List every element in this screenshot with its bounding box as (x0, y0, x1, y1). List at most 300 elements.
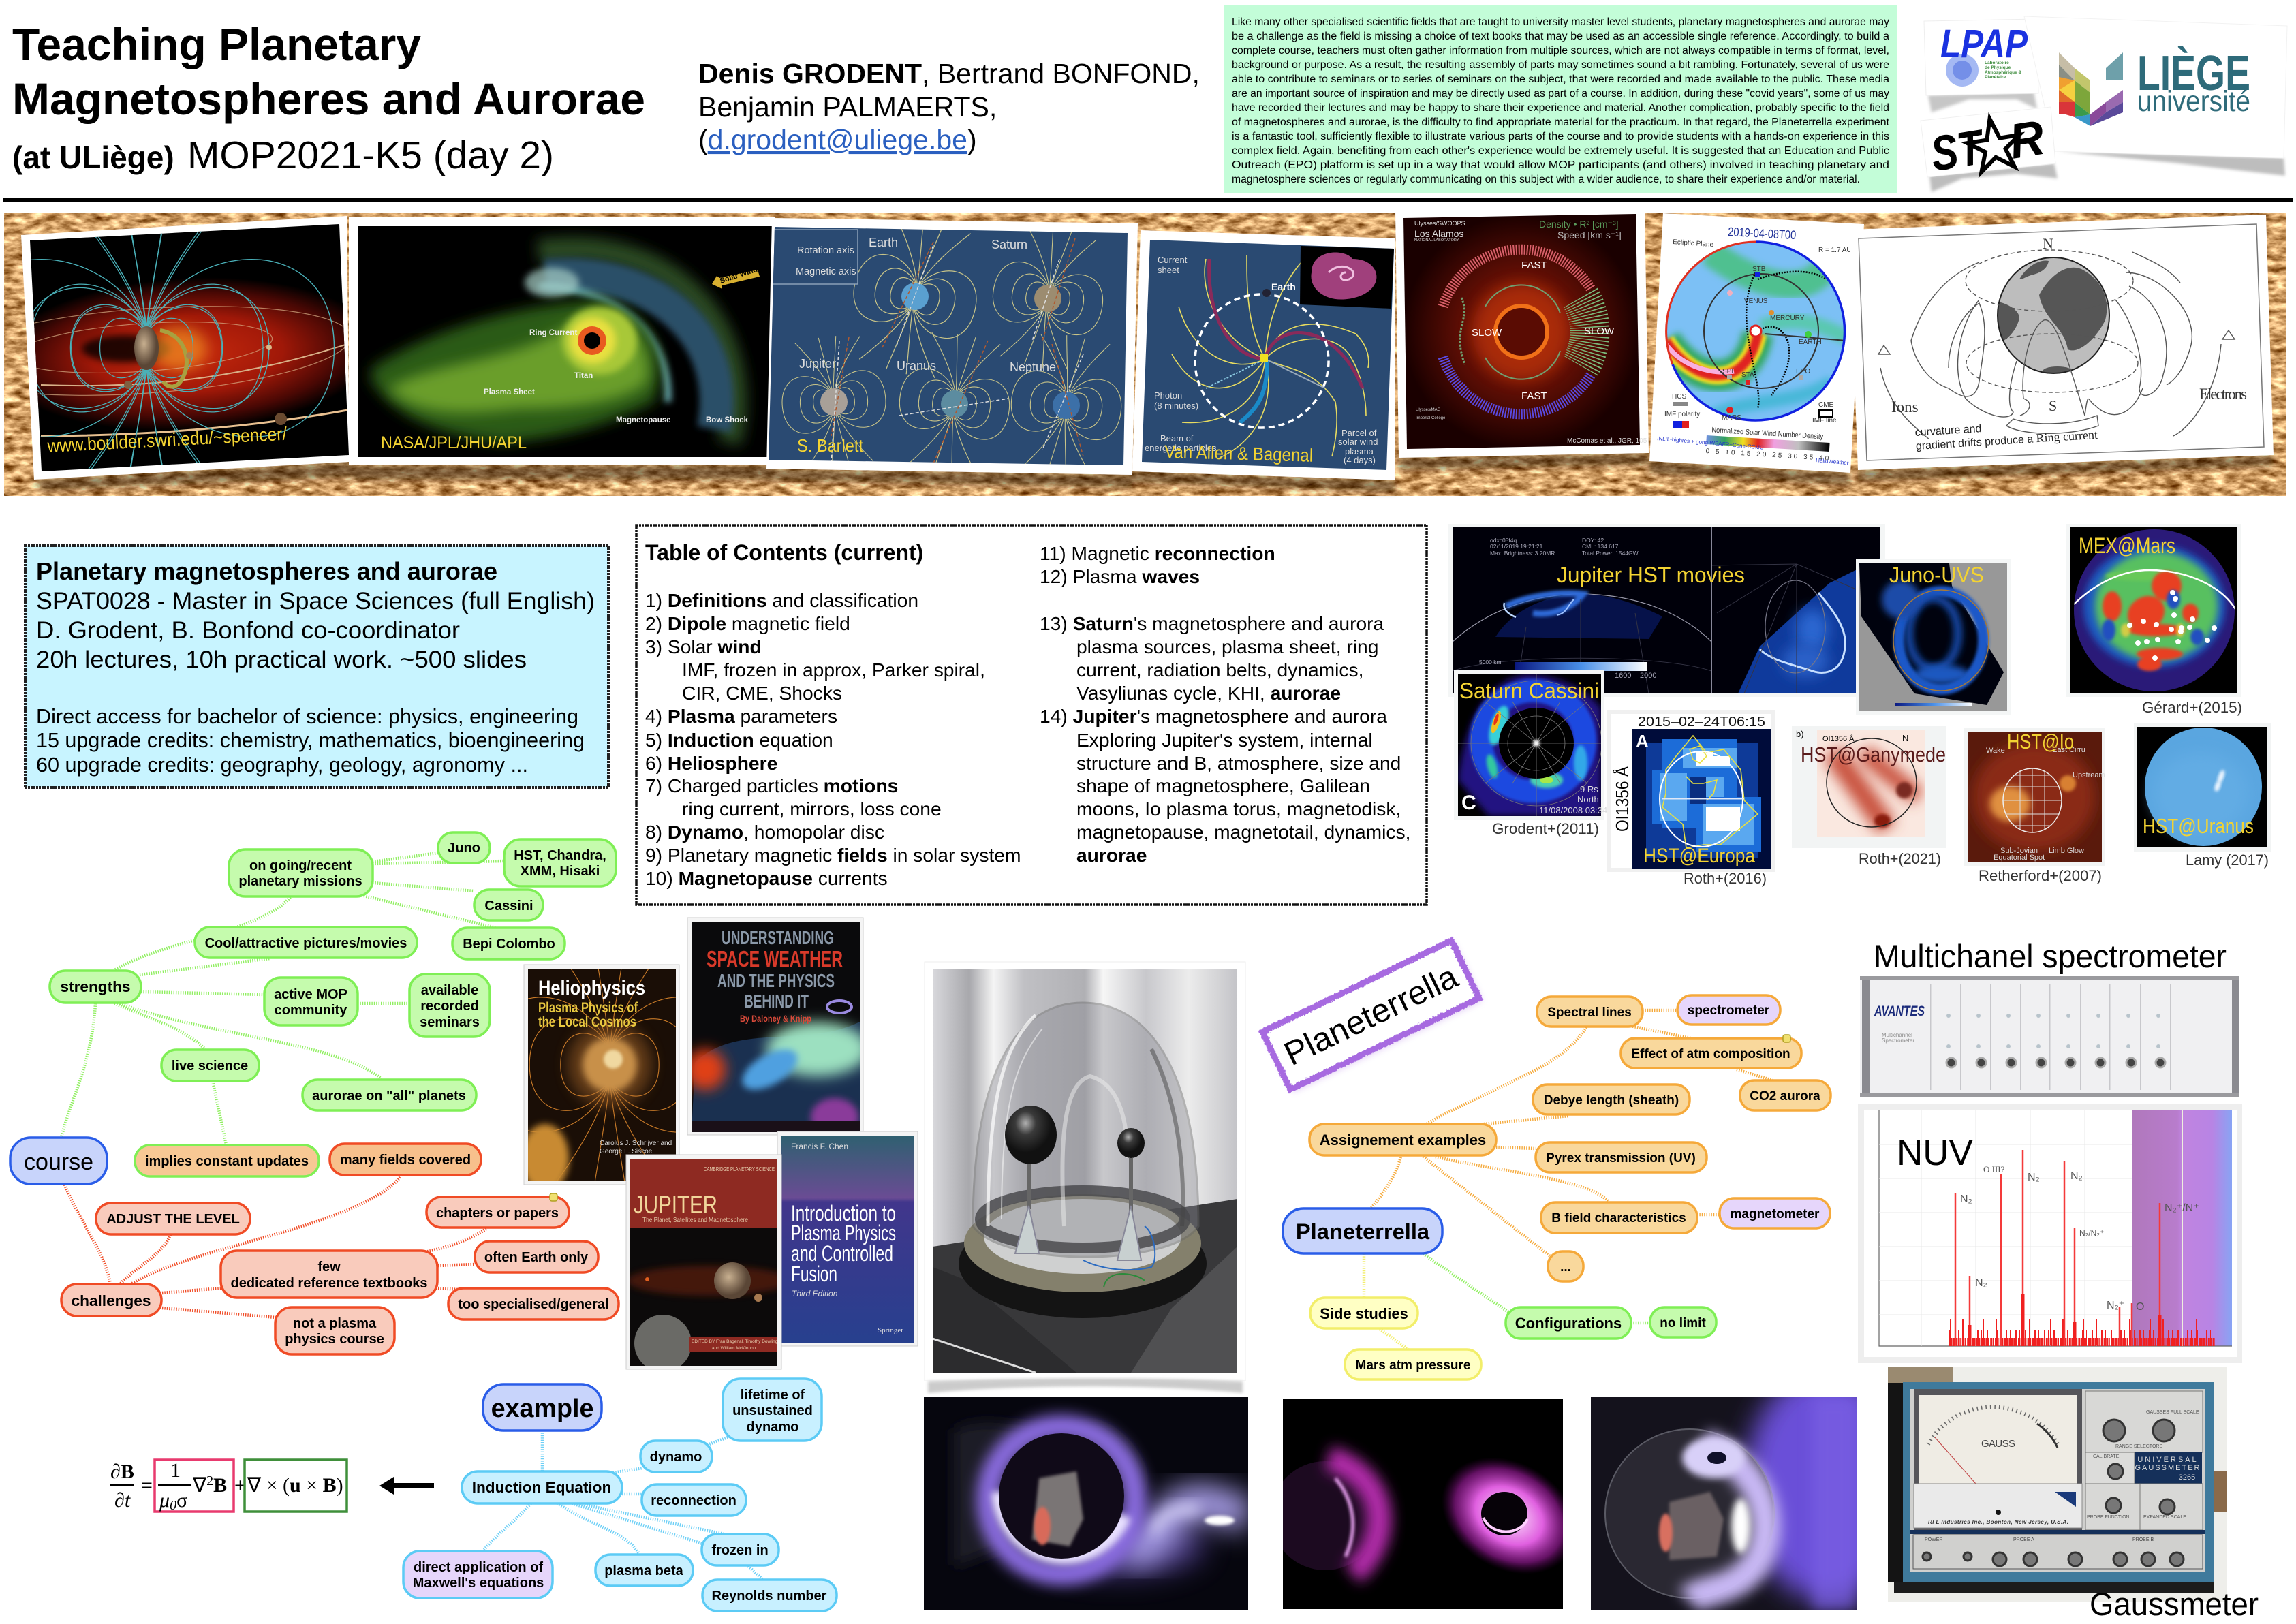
node: active MOP (264, 978, 358, 1025)
node: Cassini: Cassini (484, 899, 533, 914)
image: Saturn Cassini: Saturn Cassini (1459, 678, 1599, 703)
node: direct: direct application of (414, 1560, 543, 1575)
node: many fields (330, 1144, 481, 1175)
mind map: induction example (403, 1379, 837, 1611)
book: Jupiter: JUPITER (634, 1191, 717, 1219)
abstract: Outreach (EPO) platform is set up in a way that would allow MOP participants (and others) involved in teaching planetary and (1232, 159, 1889, 171)
credit: Van Allen: Van Allen & Bagenal (1164, 441, 1314, 466)
image: spectrometer rack: Multichannel (1882, 1032, 1912, 1038)
labels: solar wind: SLOW (1472, 327, 1502, 339)
abstract: complex field. Again, benefiting from each other's experience would be extremely useful. It is suggested that an Education and Public (1232, 145, 1889, 157)
mind map: course strengths (50, 832, 616, 1176)
labels: ENLIL: EPO (1796, 368, 1810, 375)
node: not a plasma: not a plasma (293, 1316, 377, 1331)
labels: ENLIL: CME (1818, 401, 1834, 409)
node: Cool (195, 927, 417, 958)
mind map: course challenges (61, 1144, 619, 1354)
book: Jupiter (626, 1155, 790, 1372)
mind map: planeterrella assignments (1309, 995, 1831, 1281)
node: chapters (426, 1197, 569, 1228)
book: Introduction to Plasma Physics (777, 1131, 918, 1346)
peak labels: N₂ (1960, 1193, 1972, 1205)
photo: ring current diagram (1849, 215, 2274, 470)
marker (1783, 1035, 1790, 1042)
node: available: seminars (420, 1015, 480, 1030)
equation: induction: 1 (170, 1459, 181, 1482)
panel: table of contents: IMF, frozen in approx, Parker spiral, (682, 659, 985, 681)
panel: table of contents: Vasyliunas cycle, KHI, aurorae (1076, 682, 1341, 704)
node: too: too specialised/general (458, 1297, 609, 1312)
arrow: equation pointer (379, 1477, 434, 1495)
panel: table of contents: 11) Magnetic reconnection (1040, 542, 1275, 564)
node: reconnection (642, 1484, 746, 1516)
peak labels (1960, 1164, 2199, 1313)
node: Planeterrella tag (1262, 940, 1482, 1093)
image: spectrometer rack (1860, 976, 2239, 1097)
node: spectrometer (1677, 995, 1780, 1025)
image: MEX at Mars: MEX@Mars (2079, 533, 2175, 558)
image: HST at Io: Equatorial Spot (1994, 854, 2045, 862)
mind map: side studies (1310, 1298, 1481, 1379)
book: Jupiter: The Planet, Satellites and Magnetosphere (642, 1216, 748, 1224)
image: HST at Io: Sub-Jovian (2000, 847, 2038, 855)
panel: table of contents: plasma sources, plasma sheet, ring (1076, 636, 1378, 657)
image: MEX at Mars (2066, 524, 2241, 697)
mind map: configurations (1506, 1307, 1716, 1339)
panel: table of contents: 12) Plasma waves (1040, 565, 1200, 587)
logo: STAR: ST (1927, 120, 1989, 182)
image: HST at Europa (1607, 710, 1775, 872)
panel: table of contents: 13) Saturn's magnetosphere and aurora (1040, 612, 1384, 634)
equation: induction: + (234, 1474, 246, 1497)
labels: solar wind: Los Alamos (1414, 228, 1463, 239)
abstract: able to contribute to seminars or to series of seminars on the subject, that were recorded and made available to the public. These media (1232, 74, 1889, 85)
image: gaussmeter: GAUSSMETER (2135, 1464, 2201, 1472)
panel: table of contents: 9) Planetary magnetic fields in solar system (645, 844, 1021, 866)
labels: solar wind (1414, 219, 1647, 445)
image: HST at Io (1964, 728, 2105, 866)
panel: table of contents: shape of magnetosphere, Galilean (1076, 775, 1370, 796)
labels: planets: Jupiter (799, 357, 836, 371)
photo: planetary dipoles (763, 206, 1138, 482)
abstract: of magnetospheres and aurorae, is the difficulty to find appropriate material for the practicum. In that regard, the Planeterrella experiment (1232, 116, 1890, 128)
image: HST at Uranus: HST@Uranus (2143, 814, 2254, 838)
node: available: recorded (420, 999, 479, 1014)
node: not a plasma: physics course (285, 1332, 384, 1347)
image: HST at Europa: A (1636, 731, 1649, 751)
node: side studies (1310, 1298, 1418, 1328)
labels: solar wind: Ulysses/MAG (1416, 408, 1441, 412)
labels: ENLIL: STA (1741, 371, 1754, 379)
labels: spiral: Parcel of (1341, 428, 1377, 438)
node: configurations (1506, 1307, 1631, 1339)
panel: table of contents: 5) Induction equation (645, 729, 833, 751)
node: mars (1345, 1349, 1481, 1379)
abstract: complete course, teachers must often gather information from multiple sources, which are not always compatible in terms of format, level, (1232, 45, 1889, 57)
book: Heliophysics: the Local Cosmos (538, 1014, 636, 1030)
node: pyrex: Pyrex transmission (UV) (1546, 1151, 1696, 1166)
node: HST: XMM, Hisaki (521, 864, 600, 879)
equation: induction: ∇ (193, 1474, 206, 1497)
peak labels: N₂/N₂⁺ (2079, 1228, 2104, 1238)
title: Magnetospheres and Aurorae (12, 74, 645, 124)
labels: ENLIL: IMF line (1812, 417, 1837, 424)
panel: course summary: D. Grodent, B. Bonfond co-coordinator (36, 616, 460, 644)
node: ellipsis: ... (1560, 1260, 1571, 1275)
panel: table of contents: 1) Definitions and classification (645, 589, 918, 611)
image: Saturn Cassini: North (1577, 794, 1599, 805)
node: available (409, 974, 490, 1037)
book: Heliophysics: Plasma Physics of (538, 1000, 638, 1016)
node: reconnection: reconnection (651, 1493, 736, 1508)
node: course (10, 1138, 107, 1184)
cork background (4, 213, 2286, 496)
image: Jupiter HST movies: CML: 134.617 (1582, 543, 1619, 550)
node: CO2 (1740, 1080, 1831, 1110)
logo: Liège université: LIÈGE (2137, 46, 2250, 101)
panel: table of contents: moons, Io plasma torus, magnetodisk, (1076, 798, 1401, 819)
node: few (221, 1251, 437, 1298)
book: Understanding Space Weather: UNDERSTANDING (722, 927, 834, 948)
image: HST at Io: HST@Io (2007, 730, 2074, 753)
image: HST at Europa: HST@Europa (1643, 845, 1755, 867)
labels: ENLIL: 2019-04-08T00 (1728, 225, 1797, 242)
colorbar (1705, 426, 1831, 463)
image: HST at Io: Wake (1986, 747, 2005, 755)
image: Jupiter HST movies (1448, 524, 1885, 697)
book: Understanding Space Weather: AND THE PHYSICS (717, 970, 835, 991)
node: updates: implies constant updates (145, 1154, 309, 1169)
node: direct: Maxwell's equations (413, 1576, 544, 1591)
node: lifetime: lifetime of (741, 1388, 805, 1403)
labels: ENLIL: STB (1752, 266, 1766, 273)
labels: planets: Rotation axis (797, 245, 854, 256)
label: Gaussmeter: Gaussmeter (2090, 1587, 2259, 1623)
book: Heliophysics (486, 909, 733, 1220)
image: gaussmeter: CALIBRATE (2093, 1454, 2120, 1459)
peak labels: O (2136, 1301, 2144, 1313)
labels: solar wind: Ulysses/SWOOPS (1414, 220, 1465, 227)
photo: aurora on sphere C (1591, 1369, 1908, 1610)
image: Jupiter HST movies: 5000 km (1479, 659, 1502, 666)
photo: ENLIL heliosphere: INLIL-highres + gong-WSAFR+Cone-CCMC (1657, 435, 1764, 451)
node: too (448, 1288, 619, 1320)
image: gaussmeter: GAUSS (1981, 1438, 2015, 1450)
image: Jupiter HST movies: DOY: 42 (1582, 537, 1604, 544)
book: Jupiter: and William McKinnon (712, 1346, 756, 1351)
logo: STAR: R (2006, 110, 2048, 170)
caption: Roth 2021: Roth+(2021) (1859, 850, 1941, 867)
panel: table of contents: structure and B, atmosphere, size and (1076, 752, 1401, 774)
chart: NUV spectrum (1858, 1104, 2242, 1363)
marker (550, 1193, 557, 1201)
labels: Saturn diagram: Ring Current (529, 329, 577, 337)
node: adjust: ADJUST THE LEVEL (106, 1212, 240, 1227)
panel: table of contents: Exploring Jupiter's system, internal (1076, 729, 1373, 751)
image: Jupiter HST movies: odxc05f4q (1490, 537, 1517, 544)
panel: table of contents (636, 525, 1427, 905)
labels: solar wind: McComas et al., JGR, 105 (1567, 437, 1647, 445)
image: HST at Ganymede: b) (1796, 729, 1804, 739)
image: gaussmeter: PROBE FUNCTION (2087, 1515, 2130, 1520)
logo: STAR (1921, 107, 2058, 192)
node: missions (229, 849, 373, 896)
node: lifetime: unsustained (732, 1403, 813, 1418)
image: gaussmeter: EXPANDED SCALE (2143, 1515, 2186, 1520)
labels: spiral: Beam of (1160, 433, 1194, 443)
labels: spiral (1145, 255, 1378, 465)
logo: LPAP: de Physique (1985, 65, 2011, 70)
equation: induction: 0 (170, 1498, 176, 1513)
peak labels: N₂⁺/N⁺ (2165, 1202, 2199, 1214)
node: active MOP: active MOP (274, 987, 347, 1002)
photo: Jupiter magnetosphere (21, 216, 349, 480)
equation: induction: 2 (206, 1473, 213, 1488)
node: live science: live science (172, 1059, 248, 1074)
title: (at ULiège) (12, 140, 174, 175)
node: strengths (50, 971, 141, 1003)
image: Jupiter HST movies: Jupiter HST movies (1557, 563, 1745, 587)
book: Heliophysics: Heliophysics (538, 977, 645, 999)
node: induction (462, 1471, 622, 1503)
photo: aurora on sphere A (924, 1397, 1248, 1610)
book: Understanding Space Weather: SPACE WEATHER (707, 946, 843, 971)
node: Bepi (452, 928, 565, 959)
labels: ENLIL: HCS (1672, 393, 1686, 401)
labels: planets: Neptune (1010, 360, 1056, 374)
labels: ENLIL: EARTH (1799, 339, 1822, 346)
node: Bepi: Bepi Colombo (463, 937, 555, 952)
logo: Liège université (2024, 16, 2287, 176)
image: Saturn Cassini: 9 Rs (1580, 784, 1598, 794)
authors: Benjamin PALMAERTS, (698, 91, 997, 123)
panel: table of contents: ring current, mirrors, loss cone (682, 798, 942, 819)
image: Saturn Cassini (1454, 670, 1607, 820)
image: Jupiter HST movies: Max. Brightness: 3.20MR (1490, 550, 1555, 557)
node: Cool: Cool/attractive pictures/movies (205, 936, 407, 951)
labels: spiral: (8 minutes) (1154, 401, 1198, 411)
equation: induction: ∇ × (u × B) (247, 1474, 343, 1497)
panel: table of contents: 4) Plasma parameters (645, 705, 837, 727)
panel: course summary: Direct access for bachelor of science: physics, engineering (36, 705, 578, 728)
labels: Saturn diagram: Plasma Sheet (484, 388, 535, 396)
node: mars: Mars atm pressure (1356, 1358, 1470, 1373)
node: missions: on going/recent (249, 858, 352, 873)
panel: table of contents: magnetopause, magnetotail, dynamics, (1076, 821, 1410, 843)
node: Juno (438, 832, 490, 863)
labels: ENLIL (1664, 225, 1852, 424)
node: spectrometer: spectrometer (1688, 1003, 1770, 1018)
equation: induction: ∂t (114, 1489, 131, 1512)
labels: ring current: N (2043, 235, 2053, 252)
node: active MOP: community (275, 1003, 347, 1018)
node: b field (1541, 1202, 1697, 1233)
image: HST at Ganymede: HST@Ganymede (1801, 743, 1946, 766)
panel: table of contents: 2) Dipole magnetic field (645, 612, 850, 634)
logo: LPAP: Planétaire (1985, 75, 2006, 80)
equation: induction: μ (159, 1489, 170, 1512)
node: adjust (96, 1203, 250, 1234)
book: Understanding Space Weather: By Daloney & Knipp (740, 1013, 811, 1024)
labels: ring current: S (2049, 397, 2057, 414)
panel: table of contents: aurorae (1076, 844, 1147, 866)
book: Jupiter: EDITED BY Fran Bagenal, Timothy Dowling (692, 1339, 778, 1344)
node: few: dedicated reference textbooks (230, 1276, 428, 1291)
image: Jupiter HST movies: 02/11/2019 19:21:21 (1490, 543, 1543, 550)
node: Planeterrella: Planeterrella (1296, 1219, 1430, 1244)
panel: course summary: SPAT0028 - Master in Space Sciences (full English) (36, 587, 595, 614)
image: gaussmeter: PROBE A (2013, 1537, 2034, 1542)
labels: ring current: Ions (1891, 399, 1919, 416)
image: gaussmeter (1888, 1367, 2227, 1602)
logo: LPAP (1924, 19, 2038, 112)
abstract: have recorded their lectures and may be happy to share their experience and material. Another complication, probably specific to the field (1232, 102, 1889, 114)
image: Jupiter HST movies: 1600 (1615, 672, 1631, 680)
authors (698, 58, 1200, 155)
node: ellipsis (1548, 1251, 1583, 1281)
panel: course summary: 15 upgrade credits: chemistry, mathematics, bioengineering (36, 729, 585, 752)
photo: aurora on spheres B (1271, 1399, 1598, 1609)
image: Jupiter HST movies: Total Power: 1544GW (1582, 550, 1639, 557)
node: updates (135, 1145, 319, 1176)
node: effect (1621, 1038, 1801, 1068)
labels: spiral: (4 days) (1344, 455, 1376, 465)
labels: planets: Saturn (991, 238, 1027, 251)
labels: planets: Earth (869, 236, 898, 249)
abstract: Like many other specialised scientific fields that are taught to university master level students, planetary magnetospheres and aurorae may (1232, 16, 1889, 28)
logo: LPAP: Laboratoire (1985, 61, 2009, 65)
image: gaussmeter: PROBE B (2132, 1537, 2154, 1542)
node: plasma beta: plasma beta (604, 1563, 684, 1578)
equation: induction: B (213, 1474, 227, 1497)
node: strengths: strengths (61, 978, 130, 995)
abstract (1224, 5, 1897, 193)
node: no limit (1650, 1307, 1716, 1337)
node: Cassini (474, 890, 543, 920)
labels: solar wind: SLOW (1584, 326, 1615, 337)
image: Saturn Cassini: 11/08/2008 03:34 (1539, 805, 1607, 815)
book: Understanding Space Weather: BEHIND IT (744, 990, 809, 1012)
credit: NASA: NASA/JPL/JHU/APL (381, 433, 527, 452)
node: often (475, 1241, 598, 1272)
book: Heliophysics: Carolus J. Schrijver and (600, 1140, 672, 1147)
caption: Roth 2016: Roth+(2016) (1684, 870, 1767, 887)
logo: LPAP: LPAP (1940, 22, 2028, 66)
labels: spiral: Earth (1271, 281, 1296, 292)
panel: table of contents: 7) Charged particles motions (645, 775, 898, 796)
panel: course summary: 20h lectures, 10h practical work. ~500 slides (36, 646, 527, 673)
title: Teaching Planetary (12, 20, 422, 69)
labels: ring current (1891, 235, 2247, 416)
logo: LPAP: Atmosphérique & (1985, 70, 2021, 75)
node: Planeterrella (1283, 1208, 1442, 1253)
abstract: are an important source of inspiration and may be directly used as part of a course. In addition, during these "covid years", some of us may (1232, 88, 1889, 99)
panel: table of contents: CIR, CME, Shocks (682, 682, 842, 704)
photo shadows (34, 453, 2274, 492)
photo: Parker spiral (1132, 230, 1395, 480)
image: HST at Io: Upstream (2073, 771, 2105, 779)
labels: solar wind: Imperial College (1416, 416, 1446, 420)
labels: ENLIL: IMF polarity (1664, 411, 1700, 418)
node: plasma beta (595, 1555, 693, 1586)
node: side studies: Side studies (1320, 1305, 1408, 1322)
abstract: magnetosphere sciences or regularly communicating on this subject with a wider audience, to share their experience and/or material. (1232, 174, 1860, 185)
colorbar: Normalized Solar Wind Number Density (1711, 426, 1824, 441)
peak labels: N₂⁺ (2107, 1300, 2124, 1311)
photo: Saturn magnetosphere (349, 217, 777, 465)
logo: Liège université: université (2137, 85, 2250, 118)
panel: course summary: 60 upgrade credits: geography, geology, agronomy ... (36, 753, 528, 777)
node: challenges (61, 1284, 161, 1316)
labels: spiral: plasma (1345, 446, 1374, 456)
authors: Denis GRODENT, Bertrand BONFOND, (698, 58, 1200, 89)
node: example (483, 1384, 602, 1431)
equation: induction: σ (176, 1489, 187, 1512)
node: spectral lines (1537, 997, 1643, 1027)
credit: Barlett: S. Barlett (797, 435, 864, 456)
node: CO2: CO2 aurora (1750, 1089, 1820, 1104)
peak labels: N₂ (2028, 1172, 2040, 1183)
photo: solar wind polar plot (1395, 206, 1649, 458)
panel: course summary: Planetary magnetospheres and aurorae (36, 557, 497, 585)
node: pyrex (1536, 1142, 1707, 1172)
labels: ENLIL: R = 1.7 AU (1818, 247, 1852, 254)
image: HST at Ganymede: OI1356 Å (1822, 734, 1855, 743)
node: dynamo (640, 1441, 712, 1472)
panel: table of contents: 6) Heliosphere (645, 752, 777, 774)
labels: ring current: Electrons (2199, 386, 2247, 403)
labels: spiral: energetic particles (1145, 443, 1217, 453)
panel: table of contents: Table of Contents (current) (645, 540, 923, 565)
photo: ring current diagram: curvature and (1914, 423, 1982, 439)
book: Introduction to Plasma Physics: and Controlled (791, 1241, 893, 1266)
node: Reynolds (702, 1580, 837, 1611)
image: Jupiter HST movies: 2000 (1640, 672, 1656, 680)
node: magnetometer: magnetometer (1731, 1207, 1820, 1221)
image: spectrometer rack: AVANTES (1874, 1003, 1925, 1019)
book: Jupiter: CAMBRIDGE PLANETARY SCIENCE (704, 1166, 775, 1172)
node: HST (504, 839, 616, 886)
node: direct (403, 1551, 553, 1598)
image: HST at Io: Limb Glow (2049, 847, 2084, 855)
equation: induction: ∂B (110, 1461, 134, 1483)
image: HST at Europa: OI1356 Å (1612, 766, 1632, 832)
labels: spiral: Photon (1154, 390, 1182, 401)
panel: table of contents: 10) Magnetopause currents (645, 867, 888, 889)
labels: Saturn diagram: Magnetopause (616, 416, 671, 424)
book: Introduction to Plasma Physics: Third Edition (792, 1289, 838, 1298)
image: gaussmeter: UNIVERSAL (2137, 1456, 2199, 1464)
node: often: often Earth only (484, 1250, 589, 1265)
labels: solar wind: Density • R² [cm⁻³] (1539, 219, 1619, 230)
node: spectral lines: Spectral lines (1547, 1005, 1632, 1020)
book: Understanding Space Weather (685, 918, 869, 1136)
peak labels: O III? (1983, 1164, 2005, 1174)
node: assignment: Assignement examples (1320, 1131, 1486, 1149)
equation: induction: = (141, 1474, 153, 1497)
image: gaussmeter: 3265 (2179, 1473, 2195, 1482)
node: debye (1533, 1084, 1690, 1114)
node: assignment (1309, 1124, 1496, 1155)
peaks (1949, 1150, 2215, 1346)
panel: table of contents: 3) Solar wind (645, 636, 762, 657)
peak labels: N₂ (1975, 1277, 1987, 1289)
node: b field: B field characteristics (1551, 1211, 1686, 1225)
node: example: example (491, 1394, 593, 1422)
peak labels: N₂ (2070, 1170, 2083, 1182)
book: Introduction to Plasma Physics: Fusion (791, 1262, 837, 1286)
node: no limit: no limit (1660, 1316, 1706, 1330)
